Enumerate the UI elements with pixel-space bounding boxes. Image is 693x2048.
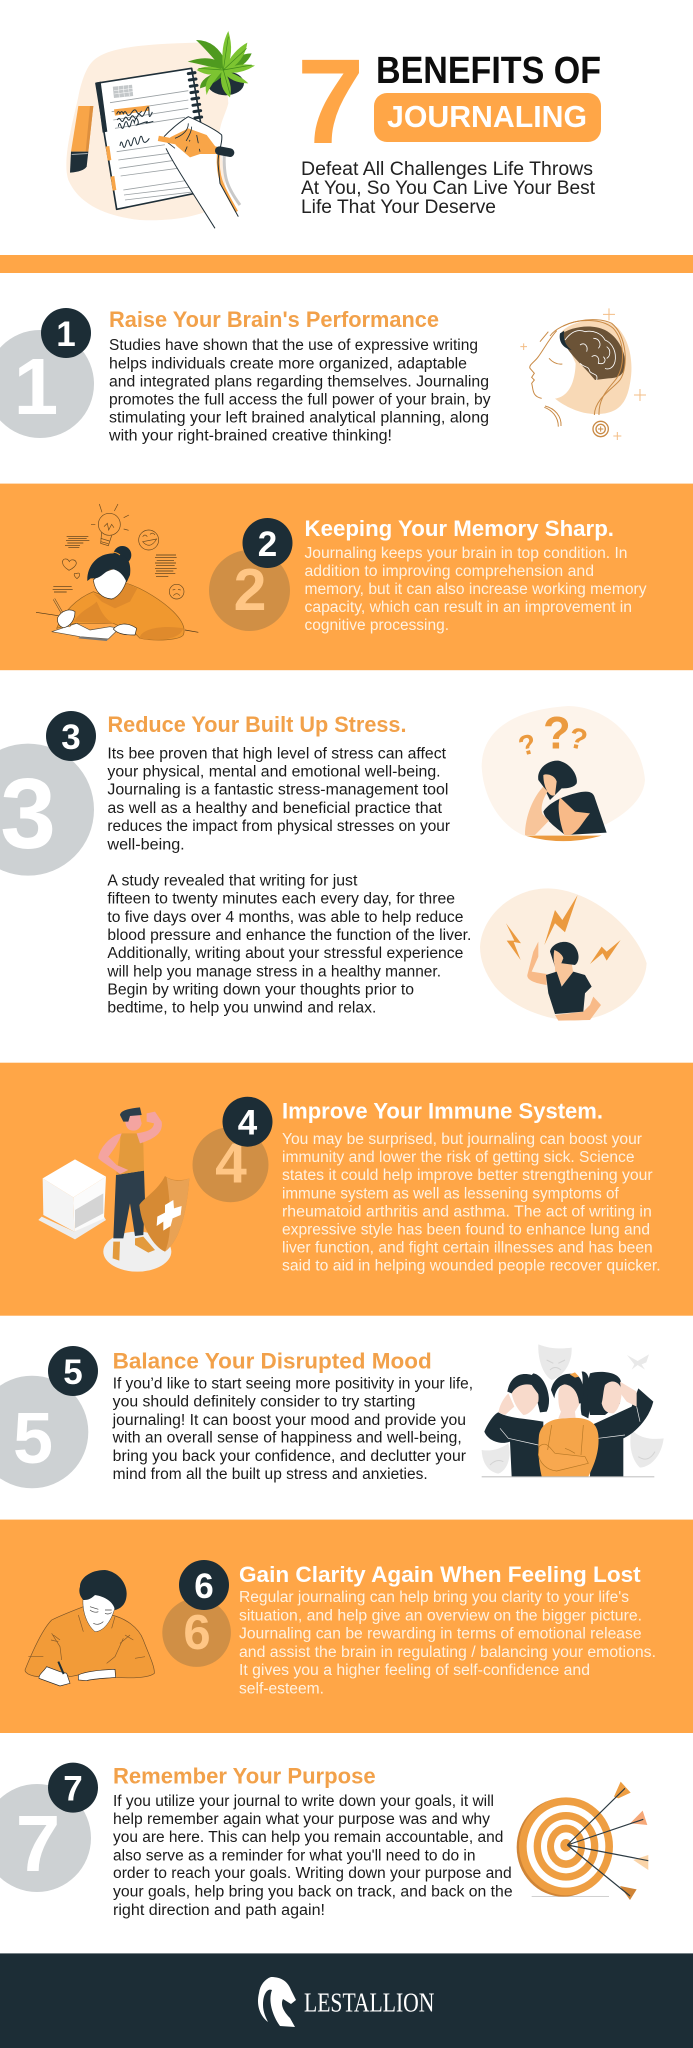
body text: You may be surprised, but journaling can boost your [282,1131,642,1148]
body text: bring you back your confidence, and declutter your [113,1448,466,1465]
body text: said to aid in helping wounded people recover quicker. [282,1258,661,1275]
orange background [0,1063,693,1316]
subtitle: Defeat All Challenges Life Throws [301,159,593,180]
body text: Studies have shown that the use of expressive writing [109,337,478,354]
icon: head with brain [520,308,646,440]
body text: immune system as well as lessening symptoms of [282,1185,619,1202]
panel: benefit 3 [0,706,647,1021]
number badge 4: 4 [238,1104,258,1142]
icon: confused woman [482,706,645,841]
body text: and assist the brain in regulating / balancing your emotions. [239,1644,656,1661]
body text paragraph 1: well-being. [106,836,185,853]
body text: expressive style has been found to enhance lung and [282,1221,650,1238]
heading: Keeping Your Memory Sharp. [304,516,614,541]
logo: horse mark [258,1977,296,2027]
subtitle: At You, So You Can Live Your Best [301,178,596,199]
body text paragraph 1 [106,746,450,853]
number badge 1 [41,308,91,358]
grey number disc 7: 7 [16,1799,60,1888]
subtitle [301,159,596,218]
body text [304,545,647,634]
panel: benefit 7 [0,1763,648,1919]
panel: benefit 5 [0,1344,664,1488]
body text paragraph 2: A study revealed that writing for just [107,872,358,889]
body text: immunity and lower the risk of getting sick. Science [282,1149,634,1166]
body text: Journaling can be rewarding in terms of emotional release [239,1626,642,1643]
body text: states it could help improve better strengthening your [282,1167,653,1184]
body text: Regular journaling can help bring you clarity to your life's [239,1589,629,1606]
body text paragraph 1: Journaling is a fantastic stress-management tool [107,782,448,799]
body text: cognitive processing. [304,617,449,634]
body text paragraph 1: your physical, mental and emotional well-being. [107,763,441,780]
body text paragraph 1: Its bee proven that high level of stress can affect [107,746,447,763]
icon: notebook and writing hand with plant [66,31,255,228]
body text paragraph 2: Begin by writing down your thoughts prior to [107,981,414,998]
body text paragraph 2: Additionally, writing about your stressful experience [107,945,463,962]
number badge 7: 7 [63,1770,83,1808]
number badge 5: 5 [63,1353,83,1392]
faded number disc 4: 4 [215,1132,247,1196]
number badge 2: 2 [258,525,277,564]
faded number disc 2: 2 [234,557,266,623]
body text: you are here. This can help you remain accountable, and [113,1829,503,1846]
grey number disc 1: 1 [14,342,58,431]
body text: order to reach your goals. Writing down your purpose and [113,1865,512,1882]
body text: help remember again what your purpose was and why [113,1811,490,1828]
body text: Journaling keeps your brain in top condition. In [304,545,628,562]
icon: confused woman: ? [566,721,590,757]
body text: promotes the full access the full power of your brain, by [109,391,491,408]
body text: your goals, help bring you back on track, and back on the [113,1884,513,1901]
body text: mind from all the built up stress and anxieties. [113,1466,428,1483]
body text paragraph 2: blood pressure and enhance the function of the liver. [107,927,471,944]
body text paragraph 2 [106,872,471,1016]
title pill: journaling [374,93,601,142]
faded number disc 6: 6 [183,1606,211,1660]
panel: benefit 1 [0,307,646,445]
icon: confused woman: ? [543,708,571,759]
number badge 7 [48,1763,98,1813]
panel: benefit 6 [0,1520,693,1733]
grey number disc 5: 5 [13,1399,53,1479]
faded number disc 4 [192,1127,268,1202]
body text paragraph 2: will help you manage stress in a healthy manner. [106,963,441,980]
icon: confused woman: ? [515,728,539,762]
number badge 6 [179,1560,229,1610]
panel: benefit 4 [0,1063,693,1316]
big numeral seven: 7 [297,33,364,169]
number badge 3 [46,711,96,761]
body text: journaling! It can boost your mood and provide you [112,1412,466,1429]
icon: man writing [25,1570,154,1686]
heading: Remember Your Purpose [113,1764,376,1788]
body text paragraph 2: bedtime, to help you unwind and relax. [107,1000,376,1016]
body text [239,1589,656,1697]
body text: also serve as a reminder for what you'll need to do in [113,1847,476,1864]
body text [282,1131,661,1275]
grey number disc 3: 3 [0,758,56,870]
number badge 2 [242,518,292,568]
body text: with your right-brained creative thinking! [108,428,392,445]
number badge 6: 6 [194,1567,214,1606]
body text: helps individuals create more organized, adaptable [109,355,467,372]
heading: Balance Your Disrupted Mood [113,1348,432,1373]
icon: strong man with shield and nightstand [38,1107,189,1272]
body text: addition to improving comprehension and [304,563,594,580]
body text paragraph 1: as well as a healthy and beneficial practice that [107,800,443,817]
body text: It gives you a higher feeling of self-confidence and [239,1662,590,1679]
grey number disc 3 [0,744,94,876]
icon: stressed woman with lightning [480,888,647,1021]
body text [108,337,491,445]
faded number disc 2 [209,550,290,631]
panel: footer [0,1953,693,2048]
body text: self-esteem. [239,1680,324,1697]
body text paragraph 2: to five days over 4 months, was able to help reduce [107,909,463,926]
title: benefits of: BENEFITS OF [376,50,601,92]
heading: Gain Clarity Again When Feeling Lost [239,1562,641,1587]
divider band [0,255,693,273]
footer background [0,1953,693,2048]
body text: right direction and path again! [113,1902,325,1919]
orange background [0,1520,693,1733]
panel: benefit 2 [0,484,693,670]
heading: Reduce Your Built Up Stress. [108,712,406,737]
body text: rheumatoid arthritis and asthma. The act of writing in [282,1203,652,1220]
orange background [0,484,693,670]
body text paragraph 2: fifteen to twenty minutes each every day, for three [107,891,455,908]
heading: Raise Your Brain's Performance [109,307,439,332]
icon: target with arrows [517,1782,648,1900]
icon: three moods women with masks [482,1344,664,1477]
body text [113,1793,513,1919]
body text: liver function, and fight certain illnesses and has been [282,1240,653,1257]
number badge 5 [48,1346,98,1396]
body text: memory, but it can also increase working memory [304,581,647,598]
body text: capacity, which can result in an improvement in [304,599,632,616]
icon: girl writing in a journal [36,504,198,641]
logo: wordmark: LESTALLION [304,1988,434,2018]
number badge 3: 3 [61,718,81,757]
body text: with an overall sense of happiness and well-being, [112,1430,462,1447]
body text: situation, and help give an overview on the bigger picture. [239,1608,642,1624]
body text: and integrated plans regarding themselves. Journaling [109,373,489,390]
grey number disc 7 [0,1784,91,1892]
heading: Improve Your Immune System. [282,1098,603,1123]
faded number disc 6 [162,1598,231,1667]
number badge 1: 1 [56,315,76,354]
title pill: journaling: JOURNALING [387,99,587,134]
body text: If you’d like to start seeing more positivity in your life, [113,1375,473,1392]
subtitle: Life That Your Deserve [301,197,496,218]
body text: If you utilize your journal to write down your goals, it will [113,1793,494,1810]
grey number disc 1 [0,330,94,438]
body text: you should definitely consider to try starting [113,1394,415,1411]
body text [112,1375,473,1483]
grey number disc 5 [0,1376,88,1488]
panel: header [66,31,601,228]
body text paragraph 1: reduces the impact from physical stresses on your [107,818,450,835]
number badge 4 [222,1097,272,1147]
body text: stimulating your left brained analytical planning, along [109,410,489,427]
